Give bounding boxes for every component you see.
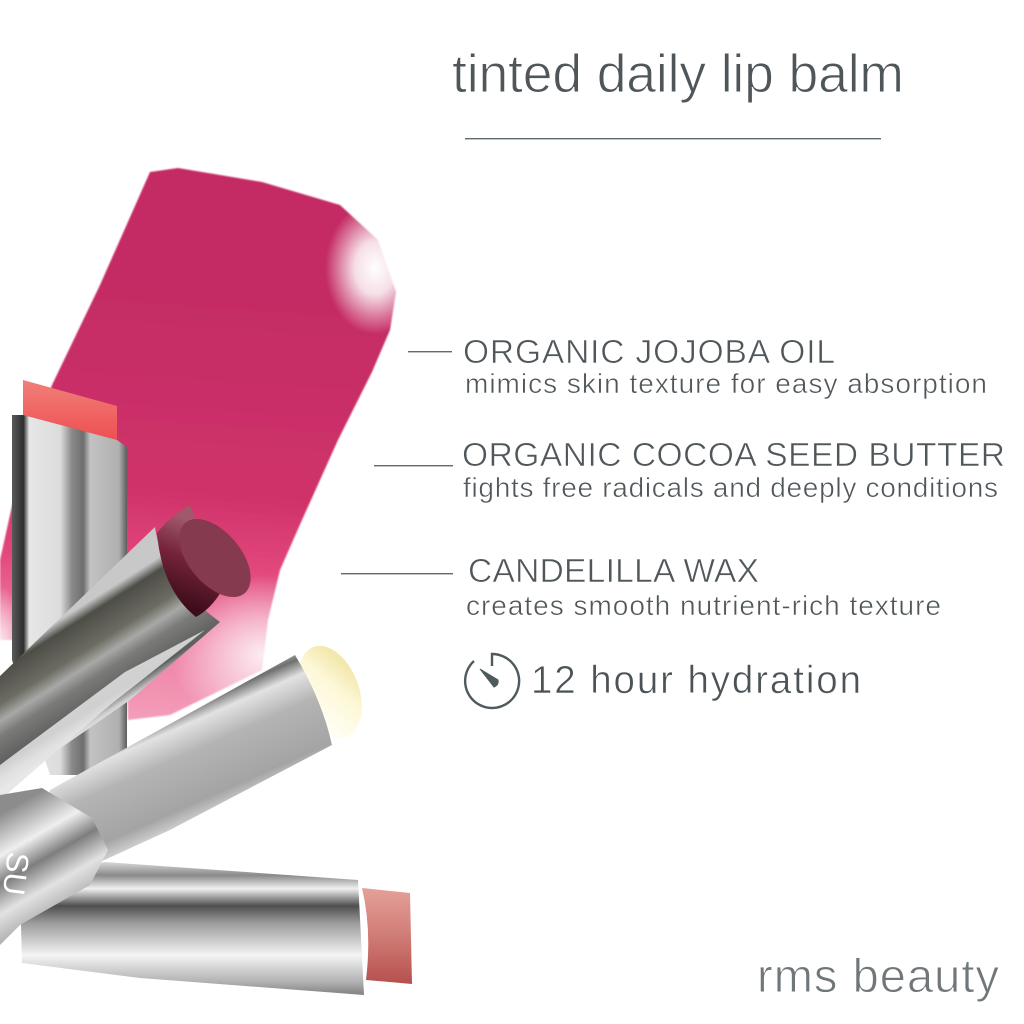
brand name: rms beauty bbox=[757, 949, 1000, 1002]
title: tinted daily lip balm bbox=[452, 45, 904, 104]
ingredient: candelilla wax: creates smooth nutrient-rich texture bbox=[466, 590, 941, 621]
product: dark plum balm bbox=[0, 505, 264, 800]
icon: hydration timer bbox=[465, 654, 519, 708]
ingredient: cocoa seed butter: fights free radicals and deeply conditions bbox=[463, 472, 998, 503]
product: clear balm with logo bbox=[0, 637, 374, 945]
ingredient: jojoba oil: mimics skin texture for easy absorption bbox=[465, 368, 987, 399]
product: rose balm horizontal bbox=[20, 862, 412, 995]
ingredient: jojoba oil bbox=[408, 334, 987, 399]
title underline bbox=[465, 138, 881, 139]
product: coral balm upright bbox=[12, 380, 127, 775]
color swatch smear bbox=[0, 168, 425, 735]
ingredient: jojoba oil: ORGANIC JOJOBA OIL bbox=[463, 334, 835, 371]
ingredient: candelilla wax bbox=[341, 553, 941, 621]
ingredient: cocoa seed butter: ORGANIC COCOA SEED BUTTER bbox=[462, 437, 1005, 474]
ingredient: candelilla wax: CANDELILLA WAX bbox=[468, 553, 759, 590]
hydration label: 12 hour hydration bbox=[531, 659, 861, 702]
ingredient: cocoa seed butter bbox=[374, 437, 1005, 503]
